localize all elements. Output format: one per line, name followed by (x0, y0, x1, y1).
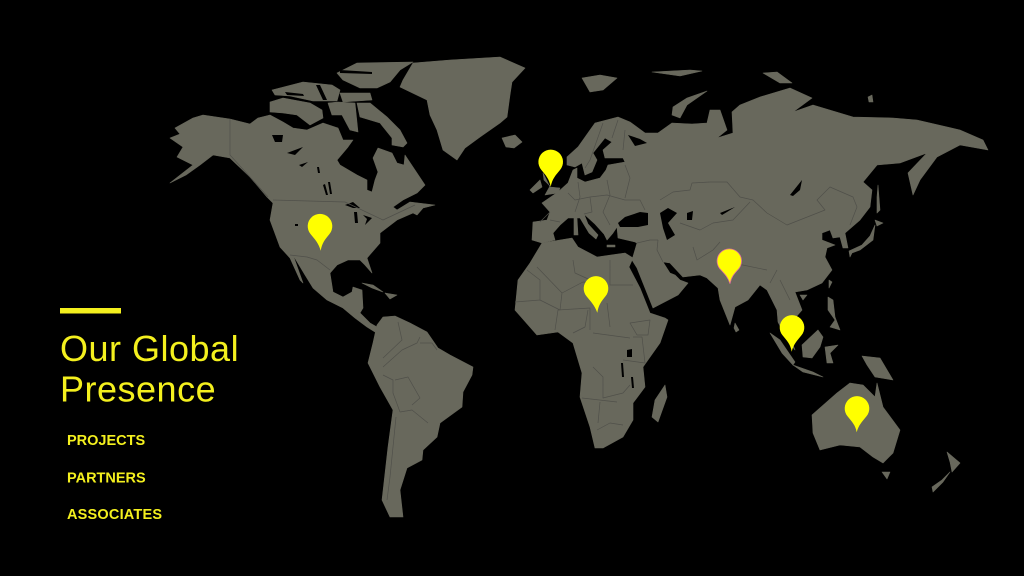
UK and Ireland (543, 173, 560, 195)
arctic channels (285, 92, 304, 96)
location pin: Southeast Asia (780, 315, 804, 352)
Svalbard (582, 75, 617, 92)
legend label: projects: PROJECTS (67, 433, 145, 449)
world map (170, 57, 988, 517)
accent bar (60, 308, 121, 314)
South America (368, 316, 473, 517)
Japan (875, 220, 883, 226)
title: Presence (60, 368, 216, 410)
Great Bear and Great Slave lakes (272, 135, 283, 142)
White Sea (628, 135, 647, 146)
Aral and Balkhash (687, 211, 693, 220)
title: Our Global (60, 328, 239, 369)
location pin: North America (308, 214, 332, 251)
location pin: United Kingdom (538, 150, 563, 187)
Great Lakes (345, 202, 360, 208)
Borneo (802, 330, 823, 358)
Novaya Zemlya (672, 91, 707, 118)
location pin: India (717, 249, 742, 284)
New Guinea (862, 356, 893, 380)
Africa (515, 238, 668, 448)
Tasmania (882, 472, 890, 479)
country borders (230, 119, 857, 500)
lakes and inland seas (272, 70, 802, 388)
Madagascar (652, 385, 667, 422)
Black Sea (618, 212, 648, 227)
African borders (515, 260, 650, 430)
Philippines (828, 297, 840, 330)
Arctic islands (337, 62, 413, 88)
Sumatra (770, 333, 795, 365)
Taiwan and Hainan (829, 280, 832, 288)
legend label: associates: ASSOCIATES (67, 507, 162, 523)
North America (170, 115, 435, 332)
New Zealand (947, 452, 960, 472)
European borders (540, 120, 645, 225)
Greenland (400, 57, 525, 160)
Eurasia (532, 88, 988, 350)
Cuba and Caribbean (362, 283, 383, 292)
Iceland (502, 135, 522, 148)
landmasses (170, 57, 988, 517)
Russian arctic islands (652, 70, 702, 76)
Baikal (790, 180, 802, 196)
South American borders (383, 322, 437, 500)
Lake Victoria (627, 349, 632, 357)
legend label: partners: PARTNERS (67, 470, 146, 486)
Sri Lanka (734, 323, 739, 332)
Sulawesi (825, 345, 838, 363)
Australia (812, 383, 900, 463)
Asian borders (637, 182, 857, 300)
North American borders (230, 119, 415, 270)
Sakhalin (877, 185, 880, 213)
location pin: Australia (845, 396, 869, 432)
Java (793, 365, 823, 377)
Mediterranean islands (574, 218, 578, 235)
Tanganyika and Malawi (621, 363, 624, 377)
location pin: Central Africa (584, 276, 608, 313)
Caspian Sea (660, 208, 677, 240)
